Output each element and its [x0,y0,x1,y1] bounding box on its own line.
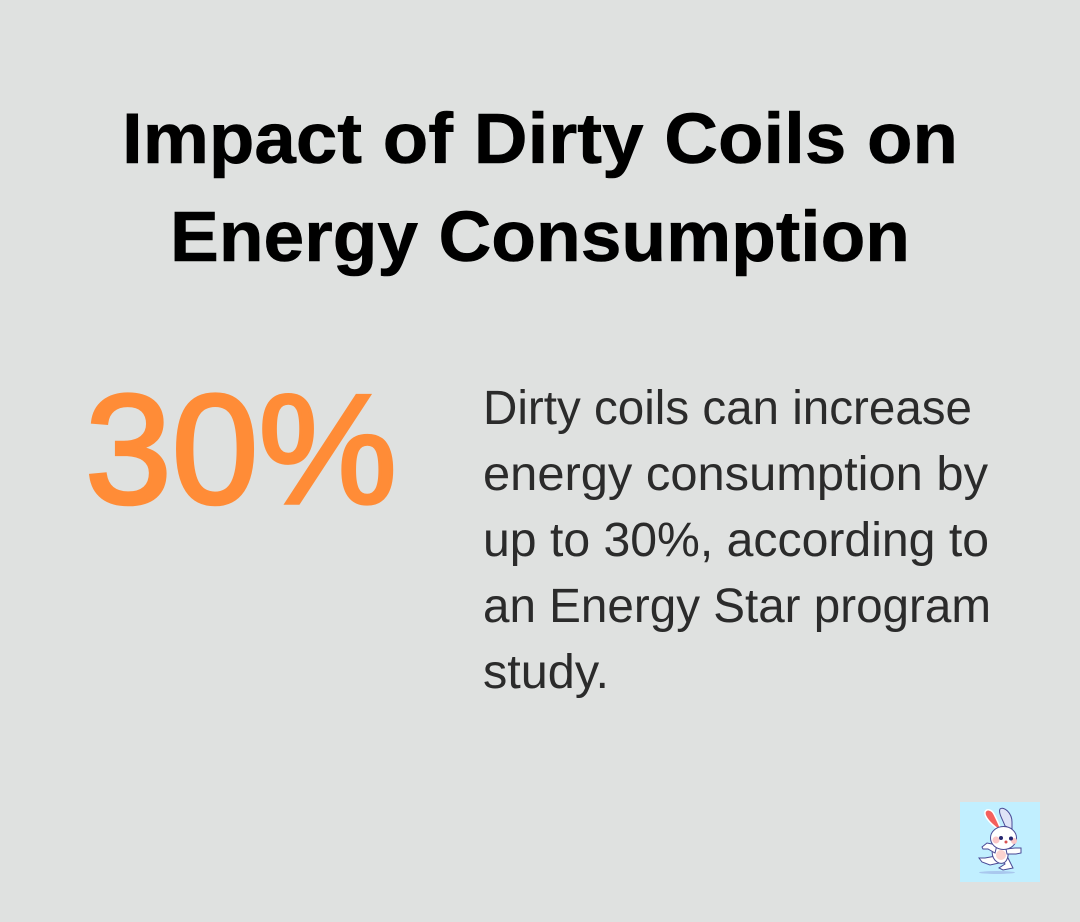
bunny right arm [1006,848,1021,854]
title: Energy Consumption [170,198,910,277]
bunny head [990,826,1016,850]
icon: bunny logo [960,802,1040,882]
description text: energy consumption by [483,448,988,501]
description text: up to 30%, according to [483,514,989,567]
description text: study. [483,646,609,699]
description text [483,382,991,699]
description text: an Energy Star program [483,580,991,633]
bunny eyes [999,836,1003,840]
bunny back leg [979,856,999,865]
description text: Dirty coils can increase [483,382,972,435]
title: Impact of Dirty Coils on [122,100,958,179]
bunny shadow [979,871,1015,874]
bunny left ear [985,810,1000,829]
bunny front leg [999,858,1013,870]
bunny mouth [1004,840,1008,844]
bunny belly [996,850,1006,860]
bunny left arm [982,843,997,853]
bunny right ear [1000,808,1012,829]
bunny cheeks [992,836,1000,844]
title [122,100,958,277]
big statistic: 30%: 30% [85,363,397,537]
bunny body [992,846,1008,863]
